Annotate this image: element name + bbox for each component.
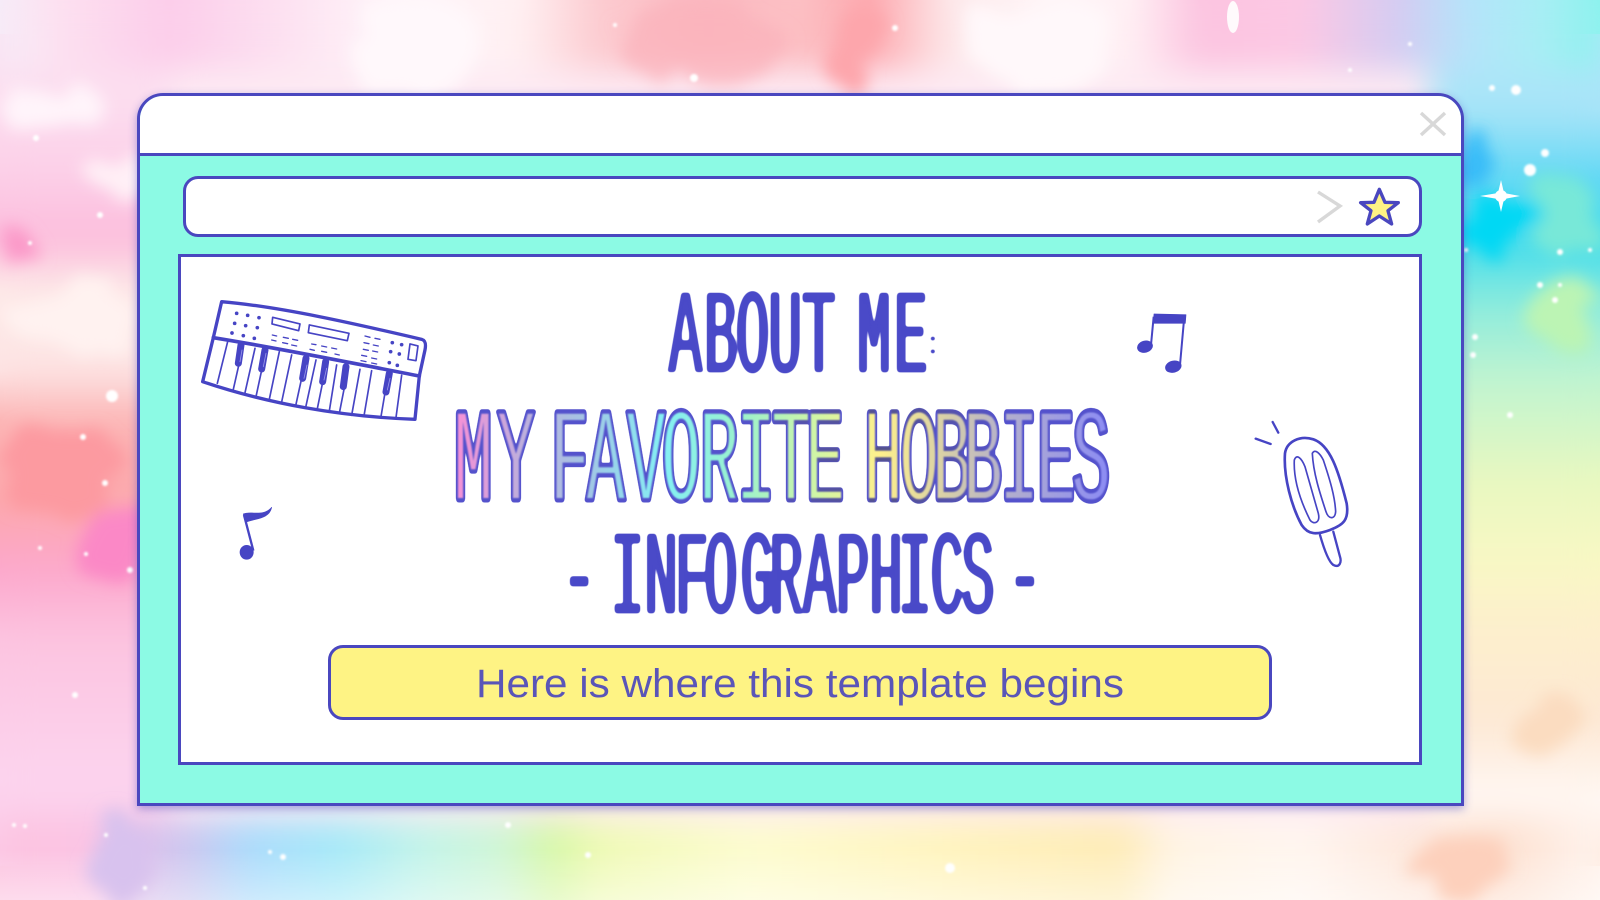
icon: star [1361, 189, 1398, 224]
icon: keyboard [203, 302, 426, 419]
icon: double music note [1136, 314, 1186, 375]
icon: single music note [240, 507, 272, 560]
title: my favorite hobbies: MY FAVORITE HOBBIES [454, 389, 1110, 541]
title bar [140, 96, 1461, 156]
icon: close X [1421, 113, 1445, 135]
address bar [183, 176, 1422, 237]
title: about me: : [928, 326, 938, 364]
subtitle text: Here is where this template begins [476, 662, 1124, 706]
title: infographics: - INFOGRAPHICS - [563, 514, 1041, 650]
icon: popsicle [1256, 422, 1347, 566]
browser window [137, 93, 1464, 806]
icon: chevron [1318, 192, 1340, 222]
sparkle [1227, 1, 1520, 212]
title: about me: ABOUT ME [669, 273, 927, 409]
content panel [178, 254, 1422, 765]
subtitle box [328, 645, 1272, 720]
